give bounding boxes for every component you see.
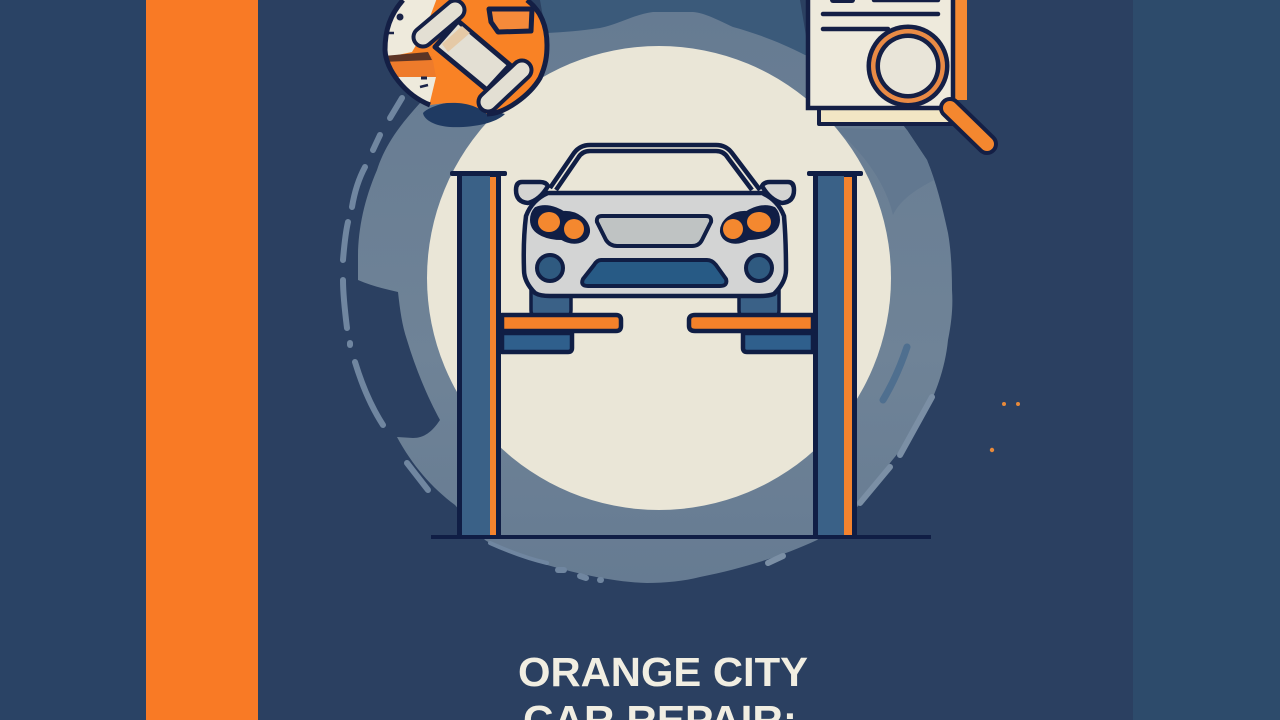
lower air intake — [582, 260, 726, 286]
windshield and roof — [550, 145, 760, 190]
car body — [524, 193, 786, 296]
lift: right post — [807, 171, 863, 537]
brush dashes around circle — [343, 98, 932, 580]
magnifier lens — [866, 24, 950, 108]
icon: wrench badge — [380, 0, 547, 127]
tires — [531, 290, 779, 318]
back page — [819, 100, 954, 124]
badge shadow — [423, 100, 505, 127]
magnifier handle — [950, 108, 987, 144]
title: ORANGE CITY — [518, 649, 808, 695]
lift: base line — [431, 535, 931, 539]
orange vertical band — [146, 0, 258, 720]
lift: left post — [450, 171, 507, 537]
side mirrors — [516, 182, 794, 203]
car on lift — [502, 145, 813, 352]
backdrop: grey brush circle — [358, 0, 952, 583]
lift arms — [502, 315, 813, 352]
title — [518, 649, 808, 720]
decorative orange dots — [990, 402, 1020, 452]
headlights — [532, 207, 778, 242]
fog lights — [537, 255, 772, 281]
grille — [597, 216, 711, 246]
icon: document with magnifier — [808, 0, 987, 144]
page text lines — [823, 0, 938, 29]
orange page edge — [953, 0, 967, 100]
front page — [808, 0, 953, 108]
cream circle — [427, 46, 891, 510]
